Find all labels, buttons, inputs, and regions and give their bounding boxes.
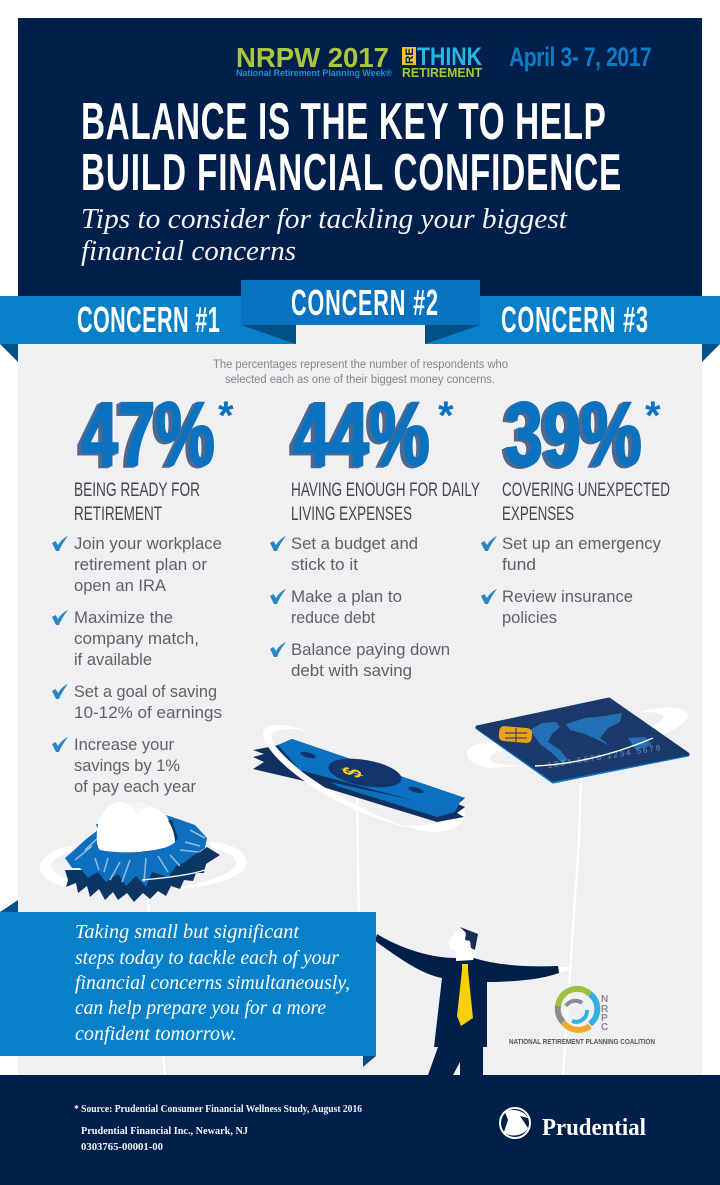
icon: credit card: 1234 5678 1234 5678: [547, 743, 661, 770]
event logo: NRPW 2017: National Retirement Planning Week®: [236, 68, 392, 78]
balancing sticks: [147, 775, 581, 1075]
subtitle: Tips to consider for tackling your biggest: [81, 203, 568, 235]
event logo: Rethink Retirement: RETIREMENT: [402, 66, 482, 80]
figure: businessman balancing concerns: [375, 927, 572, 1075]
note about percentages: selected each as one of their biggest money concerns.: [225, 374, 495, 386]
panel: light content background: [18, 325, 702, 1077]
tips: concern 3: Set up an emergency: [502, 534, 661, 553]
title: [81, 93, 621, 202]
event logo: NRPW 2017: NRPW 2017: [236, 42, 389, 73]
stat: 39 percent: 39%: [505, 385, 642, 485]
tips: concern 1: Increase your: [74, 735, 174, 754]
heading: being ready for retirement: RETIREMENT: [74, 504, 162, 525]
icon: nest with eggs: [40, 802, 247, 902]
footer source text: * Source: Prudential Consumer Financial Wellness Study, August 2016: [74, 1104, 362, 1115]
footer source text: [74, 1104, 362, 1153]
callout banner: Taking small but significant: [75, 921, 299, 943]
callout banner: confident tomorrow.: [75, 1023, 237, 1045]
logo: National Retirement Planning Coalition: NATIONAL RETIREMENT PLANNING COALITION: [509, 1037, 655, 1046]
tips: concern 1: company match,: [74, 629, 199, 648]
subtitle: [81, 203, 568, 267]
callout banner: financial concerns simultaneously,: [75, 972, 350, 994]
tips: concern 3: [481, 534, 661, 627]
callout banner: steps today to tackle each of your: [75, 947, 339, 969]
event logo: Rethink Retirement: RE: [404, 48, 416, 64]
icon: credit card: [467, 699, 688, 782]
stat: 44 percent: 44%: [293, 385, 430, 485]
tips: concern 1: Set a goal of saving: [74, 682, 217, 701]
heading: concern 1: CONCERN #1: [77, 300, 220, 340]
tips: concern 2: debt with saving: [291, 661, 412, 680]
tips: concern 1: Maximize the: [74, 608, 173, 627]
logo: Prudential: [500, 1108, 646, 1141]
heading: being ready for retirement: [74, 480, 200, 525]
tips: concern 1: retirement plan or: [74, 555, 207, 574]
note about percentages: The percentages represent the number of respondents who: [213, 359, 508, 371]
stat: 39 percent: *: [645, 394, 661, 438]
tips: concern 1: 10-12% of earnings: [74, 703, 222, 722]
tips: concern 3: Review insurance: [502, 587, 633, 606]
tips: concern 1: [52, 534, 222, 796]
tips: concern 1: of pay each year: [74, 777, 196, 796]
tips: concern 3: fund: [502, 555, 536, 574]
logo: National Retirement Planning Coalition: C: [601, 1022, 608, 1033]
stat: 44 percent: *: [438, 394, 454, 438]
logo: National Retirement Planning Coalition: [509, 989, 655, 1046]
tips: concern 2: [270, 534, 450, 680]
tips: concern 2: reduce debt: [291, 608, 375, 627]
icon: stack of money: $: [336, 764, 368, 781]
callout banner: [0, 900, 376, 1067]
logo: National Retirement Planning Coalition: P: [601, 1013, 608, 1024]
heading: concern 2: CONCERN #2: [291, 283, 438, 323]
tips: concern 2: Balance paying down: [291, 640, 450, 659]
heading: daily living expenses: [291, 480, 480, 525]
center ribbon: concern 2: [241, 280, 480, 344]
event logo: Rethink Retirement: THINK: [417, 43, 482, 71]
title: BUILD FINANCIAL CONFIDENCE: [81, 144, 621, 202]
tips: concern 2: Make a plan to: [291, 587, 402, 606]
footer band: [0, 1075, 720, 1185]
logo: National Retirement Planning Coalition: R: [601, 1004, 609, 1015]
title: BALANCE IS THE KEY TO HELP: [81, 93, 606, 151]
footer source text: 0303765-00001-00: [81, 1142, 163, 1153]
heading: concern 3: CONCERN #3: [501, 300, 648, 340]
side ribbon: concerns 1 and 3: [0, 296, 720, 362]
stat: 47 percent: 47%: [81, 385, 215, 485]
tips: concern 3: policies: [502, 608, 557, 627]
icon: stack of money: [253, 725, 465, 832]
heading: daily living expenses: HAVING ENOUGH FOR DAILY: [291, 480, 480, 501]
tips: concern 1: open an IRA: [74, 576, 167, 595]
tips: concern 2: Set a budget and: [291, 534, 418, 553]
tips: concern 2: stick to it: [291, 555, 358, 574]
note about percentages: [213, 359, 508, 386]
tips: concern 1: if available: [74, 650, 152, 669]
tips: concern 1: Join your workplace: [74, 534, 222, 553]
heading: being ready for retirement: BEING READY FOR: [74, 480, 200, 501]
panel: header background: [18, 18, 702, 308]
subtitle: financial concerns: [81, 235, 296, 267]
event logo: Rethink Retirement: [402, 43, 482, 80]
event date: April 3- 7, 2017: [509, 43, 652, 73]
logo: Prudential: Prudential: [542, 1115, 646, 1141]
footer source text: Prudential Financial Inc., Newark, NJ: [81, 1126, 248, 1137]
heading: daily living expenses: LIVING EXPENSES: [291, 504, 412, 525]
stat: 47 percent: *: [218, 394, 234, 438]
heading: unexpected expenses: [502, 480, 670, 525]
tips: concern 1: savings by 1%: [74, 756, 180, 775]
heading: unexpected expenses: EXPENSES: [502, 504, 574, 525]
callout banner: can help prepare you for a more: [75, 997, 326, 1019]
logo: National Retirement Planning Coalition: N: [601, 994, 608, 1005]
